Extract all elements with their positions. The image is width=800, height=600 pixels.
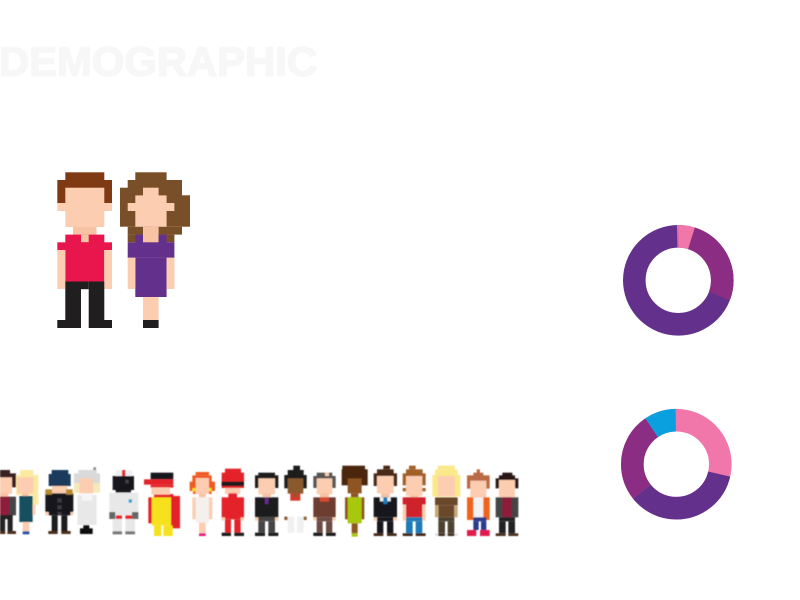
pixel character row [0,466,518,537]
icon: large pixel man [57,172,112,328]
characters: left group [0,467,180,536]
characters: right group [342,466,518,537]
characters: middle group [190,466,336,536]
title: DEMOGRAPHIC [0,38,317,84]
donut chart: upper [634,236,722,324]
icon: large pixel woman [120,172,190,328]
donut chart: lower [632,420,720,508]
